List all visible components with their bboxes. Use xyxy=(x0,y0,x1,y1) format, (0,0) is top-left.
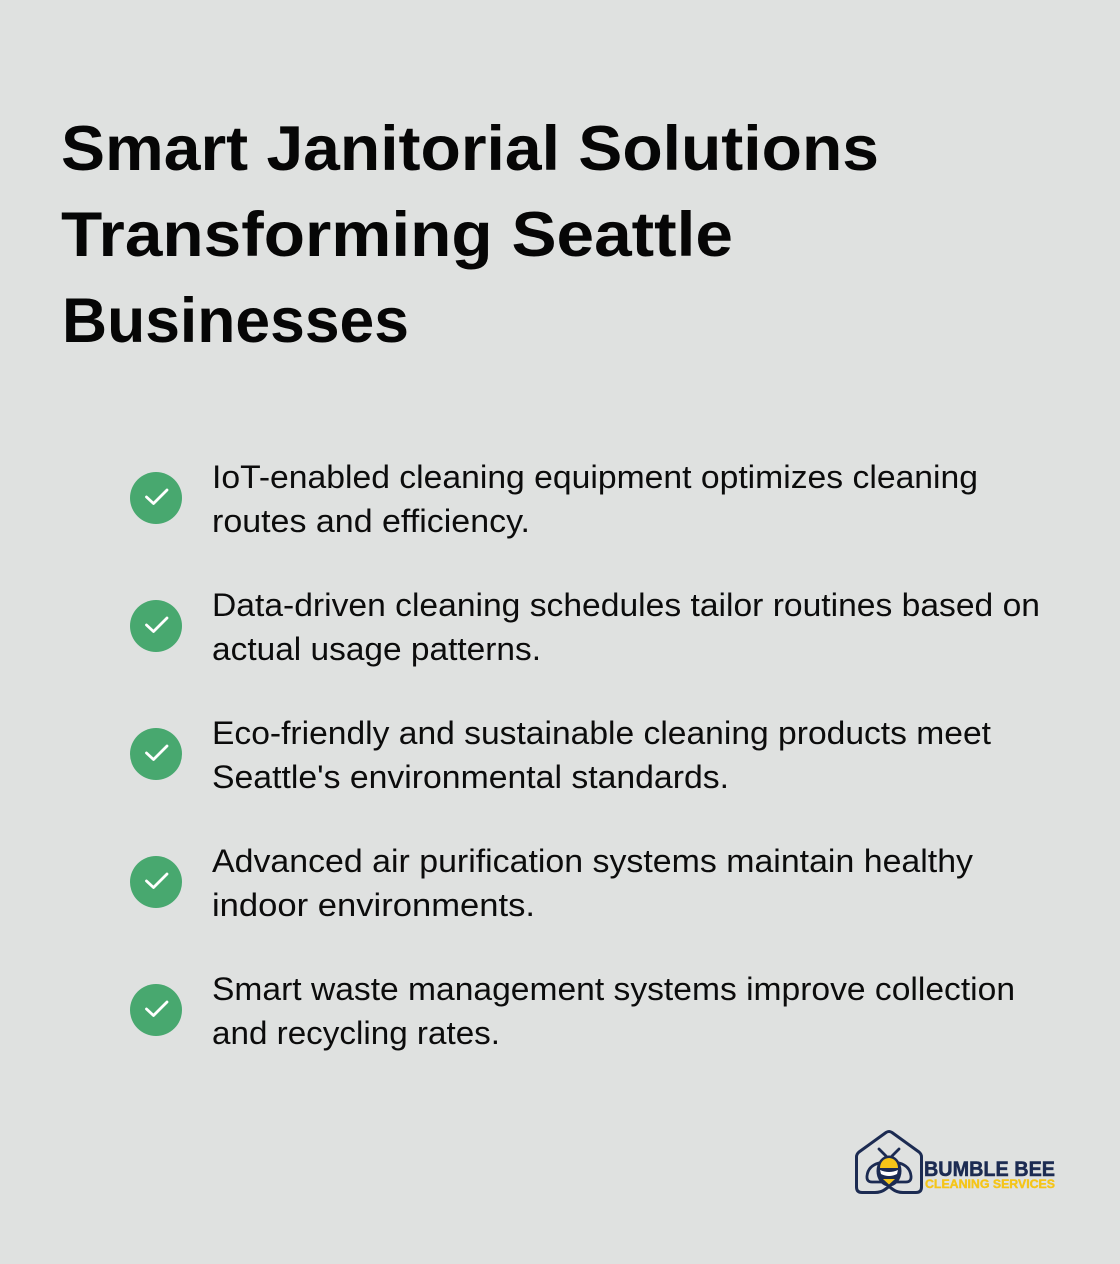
text: item 5 xyxy=(212,971,1015,1051)
text: item 5: Smart waste management systems improve collection xyxy=(212,971,1015,1007)
text: item 3 xyxy=(212,715,991,795)
text: item 1 xyxy=(212,459,978,539)
title: Transforming Seattle xyxy=(61,200,733,270)
title: Businesses xyxy=(62,286,409,356)
text: item 4 xyxy=(212,843,973,923)
icon: bee in house xyxy=(856,1132,922,1192)
icon: check 3 xyxy=(130,728,182,780)
text: item 2: Data-driven cleaning schedules tailor routines based on xyxy=(212,587,1040,623)
text: item 5: and recycling rates. xyxy=(212,1015,500,1051)
list item 4 xyxy=(130,843,973,923)
list item 5 xyxy=(130,971,1015,1051)
title: Smart Janitorial Solutions xyxy=(61,114,879,184)
icon: check 5 xyxy=(130,984,182,1036)
logo wordmark: BUMBLE BEE xyxy=(924,1158,1055,1181)
logo: Bumble Bee Cleaning Services xyxy=(856,1132,1055,1192)
text: item 1: routes and efficiency. xyxy=(212,503,530,539)
list item 3 xyxy=(130,715,991,795)
checklist xyxy=(130,459,1040,1051)
text: item 2: actual usage patterns. xyxy=(212,631,541,667)
text: item 3: Seattle's environmental standards. xyxy=(212,759,729,795)
list item 1 xyxy=(130,459,978,539)
text: item 4: Advanced air purification systems maintain healthy xyxy=(212,843,973,879)
text: item 4: indoor environments. xyxy=(212,887,535,923)
text: item 2 xyxy=(212,587,1040,667)
list item 2 xyxy=(130,587,1040,667)
title xyxy=(61,114,879,356)
icon: check 1 xyxy=(130,472,182,524)
icon: check 4 xyxy=(130,856,182,908)
text: item 1: IoT-enabled cleaning equipment optimizes cleaning xyxy=(212,459,978,495)
text: item 3: Eco-friendly and sustainable cleaning products meet xyxy=(212,715,991,751)
logo tagline: CLEANING SERVICES xyxy=(925,1177,1055,1191)
icon: check 2 xyxy=(130,600,182,652)
